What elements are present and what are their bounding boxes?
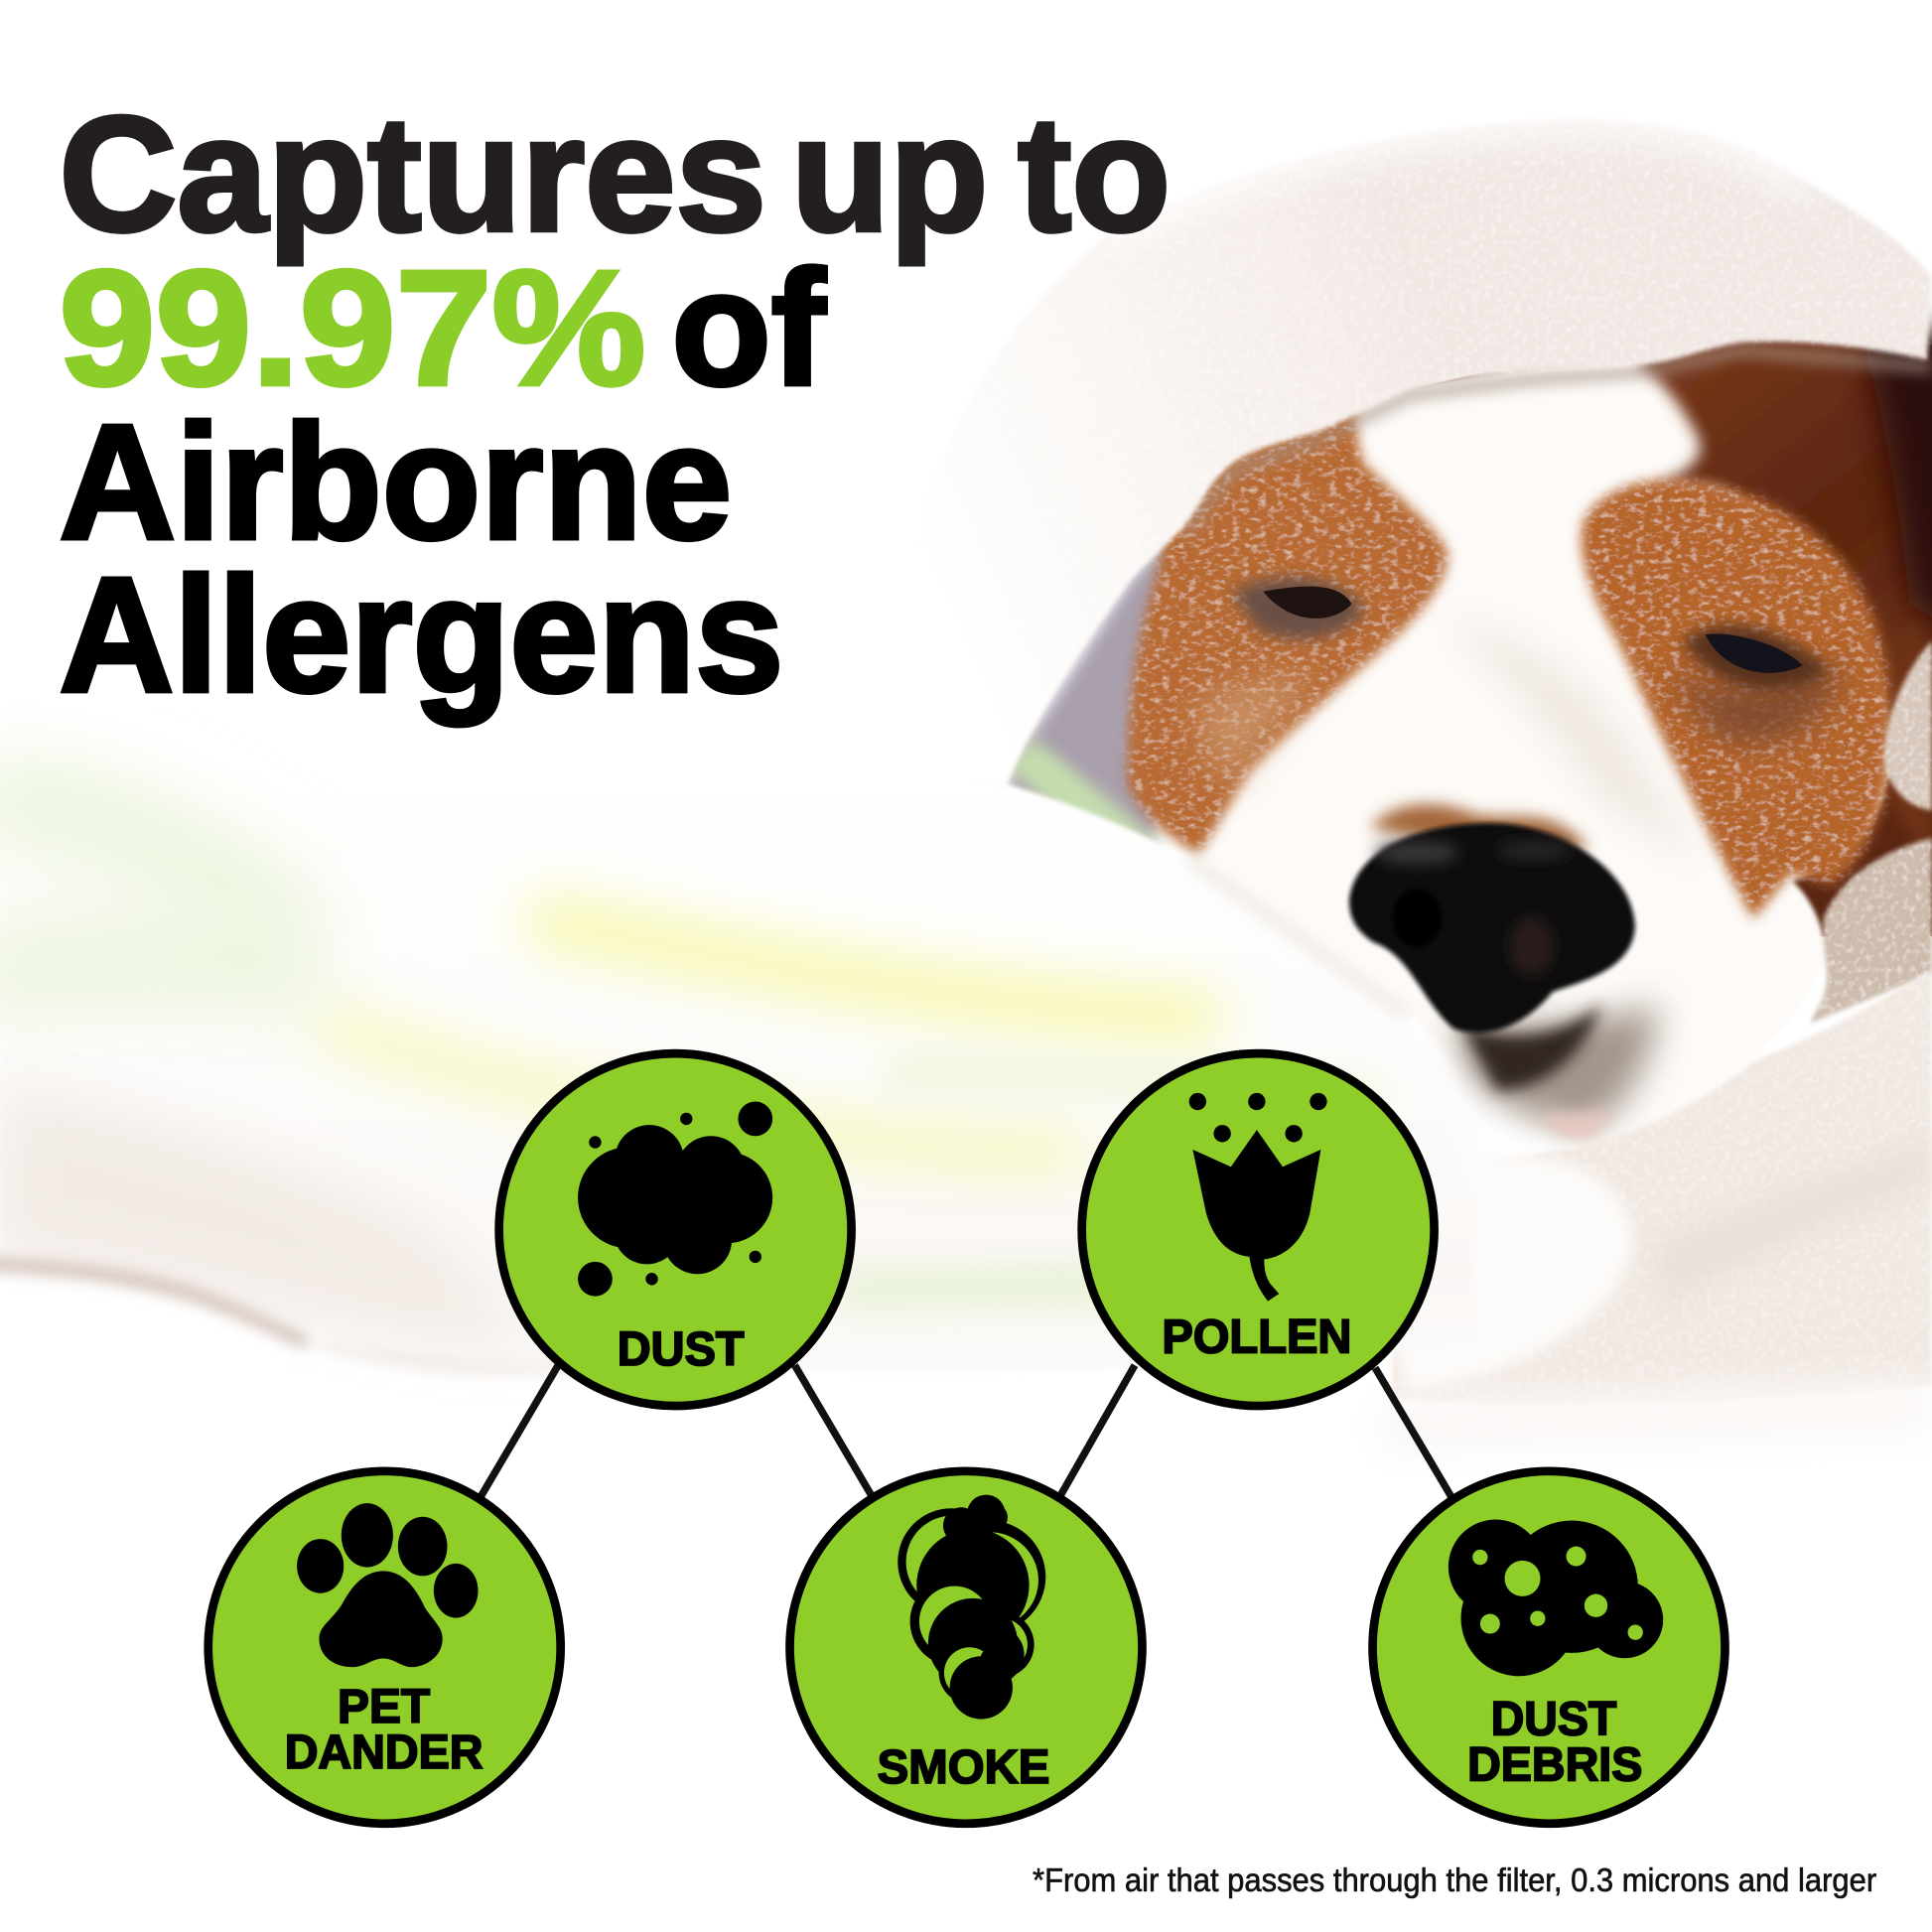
dark cavity behind dog [1004, 333, 1932, 936]
deep shadow at right edge [1861, 333, 1932, 640]
label: dust debris: DEBRIS [1467, 1737, 1642, 1791]
connector line: pollen to smoke [1059, 1365, 1135, 1497]
heading highlight 99.97%: 99.97% [60, 236, 645, 419]
label: pet dander: PET [338, 1680, 431, 1733]
top blanket hood [888, 119, 1932, 793]
badge: dust debris [1373, 1471, 1725, 1824]
shadow between blanket and muzzle [1187, 859, 1406, 1014]
dark brown side of head [1639, 333, 1932, 863]
badge: pollen [1082, 1053, 1435, 1406]
right brown eye patch [1582, 480, 1891, 919]
label: pollen: POLLEN [1162, 1311, 1351, 1364]
heading [60, 82, 1171, 726]
icon: smoke plume [897, 1495, 1045, 1720]
dog nose and mouth [1349, 823, 1657, 1140]
dog eyes [1232, 578, 1830, 690]
label: dust: DUST [618, 1322, 745, 1376]
heading line 1: up [791, 82, 988, 265]
left brown eye patch [1128, 400, 1448, 854]
badge: pet dander [208, 1471, 561, 1824]
heading word of: of [671, 236, 827, 419]
left blanket pile and floor shadow [0, 1084, 579, 1380]
badge: smoke [790, 1471, 1142, 1824]
muzzle soft shading [1453, 617, 1701, 863]
lower right blanket [1380, 970, 1932, 1453]
badge: dust [499, 1053, 852, 1406]
footnote: *From air that passes through the filter, 0.3 microns and larger [1033, 1863, 1876, 1899]
icon: dust cloud [578, 1102, 772, 1297]
dog head base [1128, 333, 1932, 1143]
shadow under hood edge [1184, 349, 1932, 533]
label: dust debris [1467, 1692, 1642, 1791]
brown marking above nose [1370, 804, 1589, 850]
icon: paw print [297, 1503, 479, 1667]
heading line 1 [60, 82, 1171, 265]
label: pet dander: DANDER [285, 1725, 483, 1779]
icon: debris cluster [1449, 1520, 1663, 1676]
right patch dark under-eye [1670, 659, 1842, 743]
heading line 4: Allergens [60, 543, 783, 726]
front blanket with stripes [0, 738, 1406, 1350]
left patch pale lower fur [1195, 671, 1318, 788]
heading line 3: Airborne [60, 390, 732, 573]
icon: tulip with pollen [1189, 1093, 1327, 1302]
beige fold at right edge [1811, 640, 1932, 1023]
photo background: dog under blanket [0, 121, 1932, 1430]
label: dust debris: DUST [1491, 1692, 1617, 1745]
label: smoke: SMOKE [878, 1740, 1049, 1794]
connector line: dust to pet dander [481, 1365, 558, 1497]
heading line 1: to [1018, 82, 1171, 265]
heading line 1: Captures [60, 82, 766, 265]
connector line: pollen to dust debris [1375, 1368, 1451, 1497]
connector line: dust to smoke [794, 1365, 873, 1497]
label: pet dander [285, 1680, 483, 1779]
hood top edge fade [1109, 119, 1811, 234]
